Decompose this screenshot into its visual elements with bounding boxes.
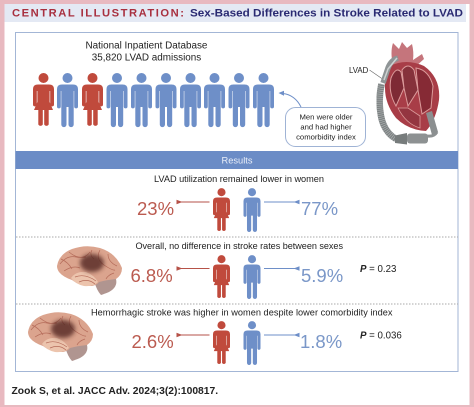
database heading: 35,820 LVAD admissions — [92, 53, 201, 64]
LVAD label — [349, 66, 384, 80]
arrow left women — [177, 200, 210, 204]
brain illustration — [57, 246, 122, 295]
divider — [16, 236, 458, 238]
arrow left women — [177, 267, 210, 270]
p value: P = 0.23 — [360, 264, 396, 275]
row 3: hemorrhagic stroke — [28, 308, 402, 365]
man icon — [244, 188, 260, 232]
1.8 percent men: 1.8% — [300, 331, 342, 352]
p value: P = 0.036 — [360, 330, 402, 342]
arrow right men — [264, 267, 299, 270]
database heading — [86, 41, 208, 64]
woman icon — [213, 188, 230, 231]
woman icon — [213, 255, 230, 298]
2.6 percent women: 2.6% — [132, 331, 174, 352]
database heading: National Inpatient Database — [86, 41, 208, 52]
results bar: Results — [221, 156, 253, 166]
arrow right men — [264, 334, 299, 336]
5.9 percent men: 5.9% — [301, 265, 343, 286]
heart with LVAD device — [380, 42, 439, 144]
man icon — [244, 321, 260, 365]
callout: men older: Men were older — [300, 112, 353, 122]
arrow left women — [177, 334, 210, 336]
row 1 heading: LVAD utilization remained lower in women — [154, 174, 324, 184]
woman icon — [213, 321, 230, 364]
people row: 10 patients — [33, 73, 274, 127]
callout: men older: and had higher — [300, 123, 352, 132]
callout: men older: comorbidity index — [296, 132, 356, 142]
citation: Zook S, et al. JACC Adv. 2024;3(2):100817. — [12, 386, 218, 397]
divider — [16, 303, 458, 305]
row 3 heading: Hemorrhagic stroke was higher in women despite lower comorbidity index — [91, 308, 393, 318]
6.8 percent women: 6.8% — [130, 265, 173, 286]
23 percent women: 23% — [137, 198, 174, 219]
LVAD label: LVAD — [349, 66, 369, 75]
results bar — [16, 151, 458, 169]
brain illustration — [28, 312, 93, 361]
row 1: utilization — [137, 174, 338, 232]
arrow: callout to men — [278, 91, 301, 107]
callout: men older — [286, 108, 366, 146]
row 2 heading: Overall, no difference in stroke rates between sexes — [136, 241, 343, 251]
main panel border — [16, 32, 458, 372]
77 percent men: 77% — [301, 198, 338, 219]
arrow right men — [264, 200, 299, 204]
title banner: CENTRAL ILLUSTRATION: — [12, 8, 184, 20]
title banner: Sex-Based Differences in Stroke Related to LVAD — [190, 8, 463, 20]
title banner — [4, 4, 466, 22]
man icon — [244, 255, 260, 299]
row 2: overall stroke — [57, 241, 396, 299]
